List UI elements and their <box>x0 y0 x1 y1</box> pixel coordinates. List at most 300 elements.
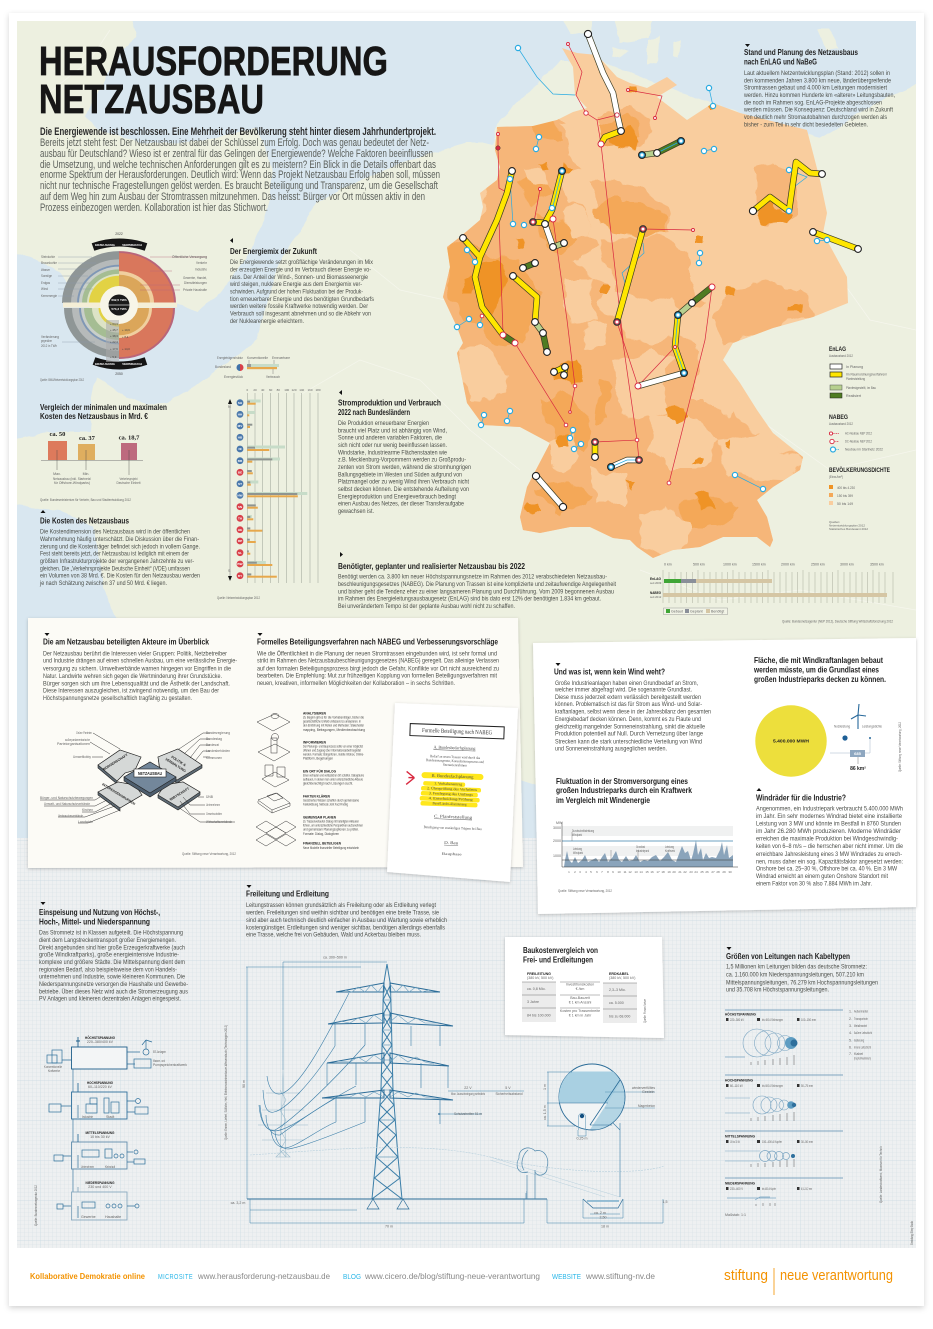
chart: fluctuation in power supply: 2000 <box>553 839 561 843</box>
six steps list: FINANZIELL BETEILIGEN <box>303 842 341 846</box>
intro text: die Umsetzung, und welche technischen Anforderungen gilt es zu meistern? Ein Blick in die Details offenbart das <box>40 159 436 171</box>
diagram: stakeholder plates: Kirchen <box>82 808 93 812</box>
chart: fluctuation in power supply: 6 <box>596 870 598 874</box>
chart: cable sizes: Quelle: Landeskraftwerk, Museum für Technik <box>879 1146 883 1203</box>
detail circle: buried cable: Magerbeton <box>638 1104 655 1108</box>
text block: Benötigter, geplanter und realisierter Netzausbau: im Rahmen des Energieleitungsausbaugesetz (EnLAG) sind bis dato erst 12% der benötigten 1.834 km gebaut. <box>338 596 601 603</box>
left legend: Wind <box>41 287 48 291</box>
Mittelspannung cable <box>725 1134 813 1167</box>
diagram: pylon blueprint: Sicherheitsabstand <box>496 1092 522 1096</box>
chart: fluctuation in power supply: im Vergleich mit Windenergie <box>556 795 650 805</box>
highlighter marks <box>419 772 484 808</box>
Hochspannung cable: HOCHSPANNUNG <box>725 1078 753 1082</box>
diagram: stakeholder plates: INTERESSENGRUPPEN <box>101 782 136 806</box>
diagram: stakeholder plates: Unternehmen <box>206 803 220 807</box>
Niederspannung cable <box>725 1182 812 1206</box>
section dividers <box>725 1010 843 1178</box>
six steps list: Zu Trassenverlaufen Dialog mit beteiligten Akteuren <box>303 820 359 824</box>
conductors and swing arcs <box>259 993 448 1149</box>
panel: construction cost comparison: Quelle: Forum Netze <box>643 999 647 1023</box>
six steps list: Neue Modelle finanzieller Beteiligung entwickeln <box>303 846 359 850</box>
diagram: voltage levels network <box>34 1035 187 1226</box>
diagram: stakeholder plates: ÜNB <box>206 795 214 799</box>
text block: Einspeisung und Nutzung: unternehmen und Industrie, sowie kleineren Kommunen. Die <box>39 974 185 981</box>
centre label: NETZAUSBAU <box>138 771 163 776</box>
title: NETZAUSBAU <box>39 76 264 122</box>
text block: Stand und Planung des Netzausbaus: Laut aktuellem Netzentwicklungsplan (Stand: 2012) sollen in <box>744 70 890 77</box>
cable layers list: Innere Leitschicht <box>854 1046 871 1050</box>
chart: energy mix rings: + 22,4 <box>110 340 118 344</box>
level: Mittelspannung: 10 bis 30 kV <box>90 1135 110 1139</box>
ground and hill <box>247 1198 547 1200</box>
chart: grid expansion timeline: seit 2009 <box>650 581 662 585</box>
legend: production and consumption: Erneuerbare <box>272 356 290 360</box>
text block: Und was ist, wenn kein Wind weht: gleichzeitig mangelnder Sonneneinstrahlung, sinkt die aktuelle <box>555 723 705 730</box>
chart: grid expansion timeline: 2500 km <box>811 562 825 566</box>
diagram: stakeholder plates: Bundesregierung <box>206 731 230 735</box>
legend: Bevölkerungsdichte <box>829 467 890 531</box>
chart: required wind area <box>753 655 902 777</box>
text block: Größen von Leitungen nach Kabeltypen: und 35.708 km Höchstspannungsleitungen. <box>726 987 829 994</box>
left legend: 2012 in TWh <box>41 344 57 348</box>
arrow marker <box>726 947 732 950</box>
chart: minimum and maximum costs: Kosten des Netzausbaus in Mrd. € <box>40 411 148 421</box>
icon: inform <box>258 734 290 761</box>
Hochspannung cable: 50–75 mm <box>801 1084 813 1088</box>
six steps list: werden. Formate: Bürgerforen, mobile Infobox, Online- <box>303 752 364 756</box>
arrow marker <box>40 510 46 513</box>
right legend: Gewerbe, Handel, <box>183 276 207 280</box>
text block: Einspeisung und Nutzung: Einspeisung und Nutzung von Höchst-, <box>39 907 160 917</box>
right legend <box>140 255 208 292</box>
website link: WEBSITE <box>552 1274 581 1281</box>
legend: EnLAG <box>829 347 887 398</box>
chart: grid expansion timeline: 1000 km <box>723 562 737 566</box>
text block: Und was ist, wenn kein Wind weht: können. Problematisch ist das für Strom aus Wind- und Solar- <box>555 701 702 708</box>
chart: fluctuation in power supply: 22 <box>683 870 687 874</box>
Niederspannung cable: 230–400 V <box>730 1187 743 1191</box>
text block: Stromproduktion und Verbrauch: einen Ausbau des Netzes, der dieser Transferaufgabe <box>338 501 464 508</box>
left legend: Erdgas <box>41 281 50 285</box>
text block: Der Energiemix der Zukunft <box>229 238 374 325</box>
Mittelspannung cable: 150–400 A Kupfer <box>762 1140 783 1144</box>
text block: Windräder für die Industrie: im Jahr. Ein sehr modernes Windrad bietet eine installierte <box>756 813 902 820</box>
text block: Der Energiemix der Zukunft: tion erneuerbarer Energie und des benötigten Grundbedarfs <box>230 296 374 303</box>
panel: formal participation document: Bedarf an neuen Trassen wird durch das <box>430 754 481 760</box>
chart: fluctuation in power supply: Kraftwerk <box>665 849 675 853</box>
icon: dialog <box>262 765 289 787</box>
chart: required wind area: Fläche, die mit Windkraftanlagen bebaut <box>754 655 883 665</box>
dimensions <box>246 962 663 1223</box>
six steps list: Faktenklärung. Methode Joint Fact Finding <box>303 802 348 806</box>
text block: Stromproduktion und Verbrauch: gewachsen ist. <box>338 508 374 515</box>
change table <box>106 320 119 362</box>
arrow marker <box>745 44 750 47</box>
leader lines <box>40 733 235 823</box>
chart: cable sizes <box>725 1010 914 1245</box>
text block: Freileitung und Erdleitung <box>245 885 447 939</box>
chart: fluctuation in power supply: 4 <box>585 870 587 874</box>
panel: formal participation document: Bauphase <box>442 852 462 856</box>
chart: fluctuation in power supply: 16 <box>650 870 654 874</box>
six steps list: gleichberechtigt nach Lösungen sucht. <box>303 782 353 786</box>
text block: Windräder für die Industrie: keiten von 6–8 m/s – die herrschen aber nicht immer. Um die <box>756 843 903 850</box>
chart: fluctuation in power supply: großen Industrieparks durch ein Kraftwerk <box>556 785 692 795</box>
chart: fluctuation in power supply: 3000 <box>553 826 561 830</box>
legend: Bevölkerungsdichte: 50 bis 149 <box>837 502 853 506</box>
cable layers list <box>849 1010 872 1060</box>
underground cable column: 2,3–3 Mio. <box>609 988 626 992</box>
diagram: pylon blueprint: ca. 300–500 m <box>323 956 347 960</box>
panel: formal participation document: Beteiligung von zuständigen Trägern bei Bau <box>424 825 482 831</box>
chart: fluctuation in power supply: 5 <box>590 870 592 874</box>
state badges: HH <box>238 412 243 416</box>
chart: state production and consumption bars: 120 <box>291 388 297 392</box>
chart: energy mix rings: + 5,9 <box>110 355 117 359</box>
level: Niederspannung: Haushalte <box>105 1215 121 1219</box>
overhead line column: (380 kV, 500 kV) <box>527 976 553 980</box>
chart: fluctuation in power supply: Durchschnittsleistung <box>572 829 594 833</box>
chart: fluctuation in power supply: 17 <box>656 870 660 874</box>
level: Höchstspannung: Pumpspeicherkraftwerk <box>153 1063 187 1067</box>
chart: fluctuation in power supply: 18 <box>661 870 665 874</box>
chart: state production and consumption bars: 80 <box>277 388 280 392</box>
level: Höchstspannung: HÖCHSTSPANNUNG <box>85 1035 115 1040</box>
blog link: www.cicero.de/blog/stiftung-neue-verantwortung <box>364 1271 540 1281</box>
legend: Bevölkerungsdichte: 150 bis 399 <box>837 494 853 498</box>
detail circle: buried cable: Gestein <box>642 1090 654 1094</box>
chart: energy mix rings <box>40 232 208 382</box>
Mittelspannung cable: 10 bis 30 kV <box>730 1140 740 1144</box>
six steps list: EIN ORT FÜR DIALOG <box>303 768 336 774</box>
detail circle: buried cable: ca. 1,5 m <box>543 1105 547 1120</box>
overhead line column: 3 Jahre <box>527 1000 539 1004</box>
panel: blueprint grid background <box>17 838 916 1248</box>
legend: Bevölkerungsdichte: Statistisches Bundesamt 2012 <box>829 527 868 531</box>
cable layers list: 3. <box>849 1024 852 1028</box>
right legend: Verkehr <box>196 261 208 265</box>
chart: grid expansion timeline: Quelle: Bundesnetzagentur (NEP 2012), Deutsche Stiftung Wirtschaftsforschung 2012 <box>782 620 893 624</box>
map: transmission line routes <box>454 30 861 511</box>
centre label <box>134 769 166 777</box>
chart: grid expansion timeline <box>650 562 893 624</box>
Höchstspannung cable <box>725 1012 816 1065</box>
diagram: stakeholder plates: Kommunen <box>206 756 222 760</box>
six steps list: Zu Beginn gilt es für die Vorhabenträger, bisher die <box>303 716 364 720</box>
diagram: stakeholder plates: Bundesrat <box>206 743 219 747</box>
text block: Stromproduktion und Verbrauch: Stromproduktion und Verbrauch <box>338 398 441 408</box>
chart: fluctuation in power supply: Grundlast <box>636 845 645 849</box>
text block: Der Energiemix der Zukunft: raus. Der Anteil der Wind-, Sonnen- und Biomasseenergie <box>230 274 368 281</box>
panel: actors and participation: Quelle: Stiftung neue Verantwortung, 2012 <box>182 852 236 856</box>
website link: www.stiftung-nv.de <box>585 1271 655 1281</box>
icon: tree and person <box>517 1148 548 1199</box>
centre totals: 602,5 TWh <box>111 298 127 302</box>
state badges: RP <box>238 539 242 543</box>
red arrow <box>406 771 415 785</box>
chart: minimum and maximum costs: ca. 18,7 <box>119 434 140 442</box>
low density patches <box>455 125 803 555</box>
bottom cap label: ERZEUGUNG <box>95 362 115 366</box>
text block: Windräder für die Industrie: Onshore bei ca. 25–30 %, Offshore bei ca. 40 %. Ein 3 MW <box>756 866 897 873</box>
text block: Stromproduktion und Verbrauch: zenten von Strom werden, während die stromhungrigen <box>338 464 471 471</box>
text block: Einspeisung und Nutzung: Niederspannungsnetze versorgen die Haushalte und Gewerbe- <box>39 981 188 988</box>
chart: minimum and maximum costs: Deutsche Einheit <box>116 481 140 485</box>
chart: cable sizes: Gestaltung: Ellery Studio <box>910 1221 914 1245</box>
cable layers list: 5. <box>849 1038 852 1042</box>
text block: Einspeisung und Nutzung: große Windkraftparks), große energieintensive Industrie- <box>39 952 179 959</box>
diagram: stakeholder plates: Bundestag <box>206 737 222 741</box>
level: Höchstspannung: Kraftwerke <box>48 1069 60 1073</box>
arrow marker <box>40 902 46 905</box>
text block: Einspeisung und Nutzung: komplexe und größere Städte. Die Mittelspannung dient dem <box>39 959 185 966</box>
legend: Bevölkerungsdichte: Netzentwicklungsplan 2012 <box>829 524 865 528</box>
six steps list: Der Planungs- und Bauprozess sollte von einer möglichst <box>303 744 363 748</box>
diagram: pylon blueprint <box>224 956 668 1228</box>
legend: NABEG: Ausbaustand 2012 <box>829 422 853 426</box>
map nodes <box>454 30 861 511</box>
diagram: stakeholder plates: Umwelt- und Naturschutzverbände <box>44 802 90 806</box>
detail circle: buried cable <box>543 1064 655 1197</box>
chart: fluctuation in power supply: 11 <box>623 870 627 874</box>
blue offshore and network lines <box>457 48 827 489</box>
in planning, white <box>536 34 684 507</box>
level: Höchstspannung: EE-Anlagen <box>153 1050 166 1054</box>
panel: formal participation document: B. Bundesfachplanung <box>431 773 474 779</box>
legend: EnLAG: Im Raumordnungsverfahren/ <box>846 372 887 376</box>
legend: Bevölkerungsdichte: BEVÖLKERUNGSDICHTE <box>829 467 890 474</box>
left legend: Wasser <box>41 268 51 272</box>
intro text: Bereits jetzt steht fest: Der Netzausbau ist dabei der Schlüssel zum Erfolg. Doch was genau bedeutet der Netz- <box>40 137 429 149</box>
level: Höchstspannung: Wasser- und <box>153 1059 165 1063</box>
panel: formal participation document: 1. Vorhabenantrag <box>434 781 462 786</box>
text block: Stand und Planung des Netzausbaus: den kommenden Jahren 3.800 km neue, länderübergreifende <box>744 77 891 84</box>
right legend: Dienstleistungen <box>184 281 207 285</box>
chart: grid expansion timeline: 3500 km <box>870 562 884 566</box>
panel: formal participation document: D. Bau <box>444 840 459 845</box>
icon: plan <box>256 821 296 846</box>
approval stage, yellow <box>463 131 858 457</box>
level: Mittelspannung <box>54 1131 145 1169</box>
text block: Freileitung und Erdleitung: werden. Freileitungen sind weithin sichtbar und benötigen eine breite Trasse, sie <box>245 909 439 916</box>
text block: Die Kosten des Netzausbaus: Wahrnehmung häufig unterschätzt. Die Diskussion über die Finan- <box>40 536 199 543</box>
state badges: SN <box>238 505 243 509</box>
level: Höchstspannung: 220–380/400 kV <box>87 1040 114 1044</box>
intro text <box>40 126 440 214</box>
panel: actors and participation <box>28 618 523 868</box>
Hochspannung cable: 60–110 kV <box>730 1084 743 1088</box>
intro text: ausbau für Deutschland? Wieso ist er zentral für das Gelingen der Energiewende? Welche Faktoren beeinflussen <box>40 148 433 160</box>
text block: Freileitung und Erdleitung: Leitungstrassen können grundsätzlich als Freileitung oder als Erdleitung verlegt <box>246 902 436 909</box>
legend: production and consumption: Verbrauch <box>266 375 280 379</box>
text block: Stand und Planung des Netzausbaus: Stand und Planung des Netzausbaus <box>744 47 858 57</box>
text block: Der Energiemix der Zukunft: schwinden. Aufgrund der hohen Fluktuation bei der Produk- <box>230 288 363 296</box>
Niederspannung cable: 6,5–24,2 mm <box>801 1187 812 1191</box>
chart: fluctuation in power supply: 25 <box>700 870 704 874</box>
text block: Einspeisung und Nutzung: betriebe. Über dieses Netz wird auch die Stromerzeugung aus <box>39 987 188 995</box>
legend: Bevölkerungsdichte: 400 bis 4.230 <box>837 486 855 490</box>
level: Hochspannung <box>49 1081 148 1119</box>
text block: actors: Natur. Landwirte wehren sich gegen die Wertminderung ihrer Grundstücke. <box>43 673 222 680</box>
chart: energy mix rings: + 10,6 <box>122 328 130 332</box>
text block: Stromproduktion und Verbrauch: sich nicht oder nur wenig beeinflussen lassen. <box>338 442 447 449</box>
timeline legend <box>664 608 728 614</box>
text block: Einspeisung und Nutzung: regionalen Bedarf, also beispielsweise dem von Handels- <box>39 966 177 973</box>
chart: required wind area: werden müsste, um die Grundlast eines <box>753 664 879 674</box>
main pylon lattice <box>372 964 402 1199</box>
text block: Stromproduktion und Verbrauch: Sonne und anderen variablen Faktoren, die <box>338 435 442 442</box>
text block: Stand und Planung des Netzausbaus: Stromtrassen gebaut und 4.000 km Leitungen modernisiert <box>744 85 887 92</box>
cable layers list: Metallmantel <box>854 1024 867 1028</box>
six steps list: den Einführung mit Rollen und Methoden: Stakeholder <box>303 724 365 728</box>
panel: construction cost comparison <box>505 937 664 1038</box>
foundation triangles <box>367 1199 409 1209</box>
six steps list: GEMEINSAM PLANEN <box>303 816 336 820</box>
six steps list: Formate: Dialog, Dialogforen <box>303 832 339 836</box>
map: Germany population density <box>430 40 860 570</box>
legend: NABEG: Neubau im Startnetz 2022 <box>845 448 883 452</box>
legend: EnLAG: Realisiert <box>846 394 861 398</box>
diagram: pylon blueprint: 2,50 <box>600 1216 606 1220</box>
text block: Einspeisung und Nutzung <box>39 902 188 1003</box>
text block: Benötigter, geplanter und realisierter Netzausbau: Bei unverändertem Tempo ist der geplante Ausbau wohl nicht zu schaffen. <box>338 603 515 610</box>
chart: required wind area: Nutzleistung <box>834 724 850 728</box>
diagram: pylon blueprint: Max. Ausschwingung seitwärts <box>451 1092 485 1096</box>
text block: Größen von Leitungen nach Kabeltypen: 1,5 Millionen km Leitungen bilden das deutsche Stromnetz: <box>726 964 867 971</box>
text block: Windräder für die Industrie: erreichbare Jahresleistung eines 3 MW Windrades zu errech- <box>756 851 902 858</box>
chart: fluctuation in power supply: 21 <box>678 870 682 874</box>
text block: formal participation: auf den formalen Beteiligungsprozess birgt jedoch die Gefahr, Konflikte vor Ort nicht ausreichend zu <box>257 665 499 672</box>
intro text: nicht nur technische Fragestellungen gelöst werden. Es braucht Beteiligung und Transparenz, um die Gesellschaft <box>40 180 438 192</box>
bottom cap label <box>94 361 146 376</box>
chart: minimum and maximum costs: Max. <box>53 472 61 476</box>
panel: map background <box>10 15 925 838</box>
chart: fluctuation in power supply: Quelle: Stiftung neue Verantwortung, 2012 <box>558 889 612 893</box>
panel: formal participation document: A. Bundesbedarfsplanung <box>433 744 476 751</box>
cable layers list: Kabel <box>854 1052 863 1056</box>
text block: Windräder für die Industrie <box>756 788 903 887</box>
top cap label <box>93 232 146 247</box>
chart: fluctuation in power supply: 2 <box>574 870 576 874</box>
chart: required wind area: 86 km² <box>850 766 866 772</box>
six steps list: mapping, Befragungen, Medienbeobachtung <box>303 728 365 732</box>
text block: Stromproduktion und Verbrauch: 2022 nach Bundesländern <box>338 407 410 417</box>
text block: Und was ist, wenn kein Wind weht: Strecken kann die stark unterschiedliche Verteilung von Wind <box>555 738 702 745</box>
overhead line column <box>522 972 556 1022</box>
six steps list: offenen und Zugang über Informationsarbeit begleitet <box>303 748 361 752</box>
chart: minimum and maximum costs: Netzausbau (inkl. Startnetz/ <box>53 477 91 481</box>
text block: Die Kosten des Netzausbaus: ein Volumen von 38 Mrd. €. Die Kosten für den Netzausbau werden <box>40 573 200 580</box>
diagram: stakeholder plates: BÜRGERSCHAFT <box>102 752 129 771</box>
diagram: pylon blueprint: 70 m <box>385 1224 393 1228</box>
microsite link: MICROSITE <box>158 1274 193 1281</box>
bottom cap label: 2050 <box>115 372 123 376</box>
icon: wind turbine <box>851 704 866 729</box>
text block: actors: Die am Netzausbau beteiligten Akteure im Überblick <box>43 636 209 646</box>
text block: Benötigter, geplanter und realisierter Netzausbau: beschleunigungsgesetzes (NABEG). Die Planung von Trassen ist eine komplizierte und zeitaufwendige Angelegenheit <box>338 581 616 588</box>
text block: actors: Der Netzausbau berührt die Interessen vieler Gruppen: Politik, Netzbetreiber <box>43 650 227 657</box>
level: Höchstspannung <box>44 1035 187 1073</box>
chart: fluctuation in power supply: 20 <box>672 870 676 874</box>
centre totals: 573,3 TWh <box>111 307 127 311</box>
chart: fluctuation in power supply: 26 <box>705 870 709 874</box>
text block: Der Energiemix der Zukunft: Die Energiewende setzt großflächige Veränderungen im Mix <box>230 259 374 266</box>
legend: production and consumption: Energieträgerstruktur <box>217 356 244 360</box>
diagram: stakeholder plates: Bürger- und Naturschutzbewegungen <box>40 796 93 800</box>
left legend <box>41 255 96 348</box>
level: Hochspannung: Stadt <box>106 1115 114 1119</box>
chart: grid expansion timeline: 500 km <box>693 562 705 566</box>
icon: analysis <box>257 714 290 731</box>
centre totals <box>108 294 130 316</box>
chart: minimum and maximum costs <box>40 402 167 502</box>
panel: wind and industry <box>533 638 916 914</box>
chart: fluctuation in power supply: Fluktuation in der Stromversorgung eines <box>556 776 688 786</box>
text block: Und was ist, wenn kein Wind weht: welcher immer abgefragt wird. Die sogenannte Grundlast. <box>554 687 692 694</box>
legend: production and consumption: Energiestück <box>224 375 243 379</box>
diagram: pylon blueprint: Schutzstreifen 51 m <box>454 1112 482 1116</box>
text block: Stand und Planung des Netzausbaus <box>743 44 895 128</box>
top cap label: VERBRAUCH <box>122 243 143 247</box>
chart: energy mix rings: + 64,3 <box>110 322 118 326</box>
diagram: stakeholder plates: Parteiorganisationen <box>57 742 90 746</box>
six steps list: gesellschaftliche Umfeld umfassend zu analysieren. In <box>303 720 361 724</box>
under construction, light green and built, dark green <box>503 141 712 352</box>
chart: state production and consumption bars <box>217 388 321 600</box>
diagram: pylon blueprint: ca. 2 m <box>594 1211 606 1215</box>
text block: Stromproduktion und Verbrauch: Windstarke, Industriearme Flächenstaaten wie <box>338 449 447 456</box>
title <box>39 38 388 122</box>
six steps list: führen, um unterschiedliche Perspektiven aufzunehmen <box>303 824 363 828</box>
underground cable column: (380 kV, 500 kV) <box>609 976 635 980</box>
state badges: NI <box>238 447 242 451</box>
left legend: Braunkohle <box>41 261 57 265</box>
detail circle: buried cable: 0,25 m <box>576 1136 588 1140</box>
level: Hochspannung: HOCHSPANNUNG <box>87 1081 113 1085</box>
panel: formal participation document: Bundesnetzagentur, Konsultationsprozess und <box>426 758 484 765</box>
legend: NABEG: NABEG <box>829 415 848 421</box>
intro text: enorme Spektrum der Herausforderungen. Deutlich wird: Wenn das Projekt Netzausbau Erfolg haben soll, müssen <box>40 169 440 181</box>
detail circle: buried cable: wiederverfülltes <box>632 1086 655 1090</box>
text block: actors: versorgung zu sichern. Umweltverbände warnen hingegen vor Eingriffen in die <box>43 665 231 672</box>
diagram: stakeholder plates: Wirtschaftsverbände <box>206 820 232 824</box>
chart: fluctuation in power supply: 12 <box>628 870 632 874</box>
arrow marker <box>44 633 50 636</box>
text block: Die Kosten des Netzausbaus <box>39 510 200 587</box>
chart: fluctuation in power supply: 9 <box>612 870 614 874</box>
text block: Einspeisung und Nutzung: dient dem Langstreckentransport großer Energiemengen. <box>39 937 176 944</box>
underground cable column: bis zu 68.000 <box>609 1014 630 1018</box>
cable layers list: 7. <box>849 1052 852 1056</box>
legend: NABEG: AC-Neubau NEP 2012 <box>845 432 872 436</box>
six steps list: ANALYSIEREN <box>303 712 326 716</box>
diagram: stakeholder plates: Landwirte <box>78 820 93 824</box>
chart: energy mix rings: + 8,4 <box>122 335 129 339</box>
arrow marker <box>340 552 343 557</box>
text block: Stand und Planung des Netzausbaus: werden. Hinzu kommen Hunderte km «alterer» Leitungsbauten, <box>743 92 895 99</box>
chart: state production and consumption bars: 140 <box>299 388 305 392</box>
text block: actors <box>43 633 237 702</box>
chart: energy mix rings: Quelle: BMU/Netzentwicklungsplan 2012 <box>40 378 84 382</box>
chart: fluctuation in power supply: Industriepark <box>636 849 649 853</box>
comparison labels column: € 1 km Anzahl <box>569 1000 591 1004</box>
six steps list: FAKTEN KLÄREN <box>303 794 330 798</box>
chart: fluctuation in power supply: 14 <box>639 870 643 874</box>
chart: fluctuation in power supply: 13 <box>634 870 638 874</box>
text block: Benötigter, geplanter und realisierter Netzausbau: Benötigter, geplanter und realisierter Netzausbau bis 2022 <box>338 561 525 571</box>
comparison labels column: € /km <box>576 987 584 991</box>
arrow marker <box>258 633 262 636</box>
